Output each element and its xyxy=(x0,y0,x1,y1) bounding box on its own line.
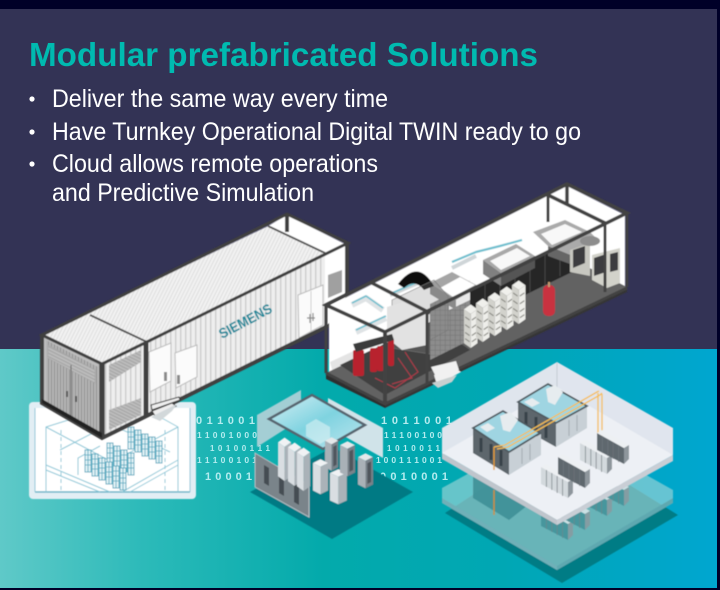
front doors xyxy=(46,340,98,432)
dark rack band xyxy=(470,240,572,320)
open rear end of container xyxy=(268,215,347,328)
cable tray blue ducts xyxy=(352,240,522,332)
top slab xyxy=(442,387,673,520)
white switchgear cabinet xyxy=(387,302,427,350)
SIEMENS logo: SIEMENS xyxy=(216,300,275,342)
binary digits: 1 0 0 0 1 xyxy=(205,471,252,483)
binary digits: 1 0 1 0 0 1 1 xyxy=(387,444,441,453)
left container: closed exterior xyxy=(42,214,348,438)
side steps xyxy=(151,397,180,416)
background: navy panel xyxy=(0,9,717,350)
rear grey air handler ducts xyxy=(430,220,598,310)
side grille panel xyxy=(109,350,141,430)
translucent right panel xyxy=(328,398,383,458)
right-end chillers xyxy=(570,236,620,288)
bullet list: Have Turnkey Operational Digital TWIN ready to go xyxy=(52,118,581,146)
red fire extinguisher xyxy=(543,282,555,316)
binary digits: 1 0 1 0 0 1 1 1 xyxy=(210,444,271,453)
bullet list: Cloud allows remote operations xyxy=(52,150,378,178)
reflected lower room and racks xyxy=(473,470,528,520)
binary digits: 1 1 0 0 1 0 0 0 xyxy=(197,430,257,440)
frame xyxy=(326,184,627,405)
bullet list: and Predictive Simulation xyxy=(52,179,314,207)
binary digits: 0 1 1 0 0 1 xyxy=(196,415,255,427)
ground shadow xyxy=(445,440,678,583)
background: teal gradient band xyxy=(0,349,717,588)
cooling duct arch xyxy=(398,271,434,290)
orange pipework xyxy=(494,391,602,470)
back walls xyxy=(442,362,557,455)
bullet list xyxy=(29,85,581,207)
binary digits: 1 1 1 0 0 1 0 0 xyxy=(384,430,442,440)
binary digits: 1 0 1 1 0 0 1 xyxy=(381,415,452,427)
binary digits: 1 0 0 1 1 1 0 0 1 xyxy=(376,455,442,465)
binary digits: 0 0 1 0 0 0 1 xyxy=(380,471,448,483)
bullet list: Deliver the same way every time xyxy=(52,85,388,113)
steel frame xyxy=(42,214,348,438)
wall cabinets and cage mesh xyxy=(430,284,470,360)
side doors xyxy=(149,343,171,392)
floor xyxy=(326,257,627,403)
middle exploded data-hall module xyxy=(250,390,413,539)
entry steps xyxy=(431,361,461,388)
binary digits: 1 1 1 0 0 1 0 1 xyxy=(197,455,257,465)
corrugated side wall xyxy=(102,253,325,438)
title: Modular prefabricated Solutions xyxy=(29,36,538,73)
binary digits xyxy=(196,415,452,483)
translucent left panel xyxy=(257,390,301,447)
lower translucent slab xyxy=(442,425,673,570)
server cabinets xyxy=(325,437,338,471)
red cabling xyxy=(375,352,418,388)
interior white wall xyxy=(329,186,625,376)
corrugated roof xyxy=(42,226,325,364)
red transformers xyxy=(353,334,394,376)
white rack row xyxy=(464,281,525,348)
dark perforated server wall xyxy=(255,453,309,517)
right container: open interior view xyxy=(326,184,627,408)
room A xyxy=(473,411,541,475)
right data-centre floor plan xyxy=(442,362,678,583)
glass ceiling frame xyxy=(269,395,365,449)
tablet wireframe panel xyxy=(29,402,196,499)
wire-mesh cage xyxy=(392,280,448,354)
room B xyxy=(518,384,587,447)
floor shadow xyxy=(250,447,413,539)
rack rows xyxy=(541,430,629,498)
